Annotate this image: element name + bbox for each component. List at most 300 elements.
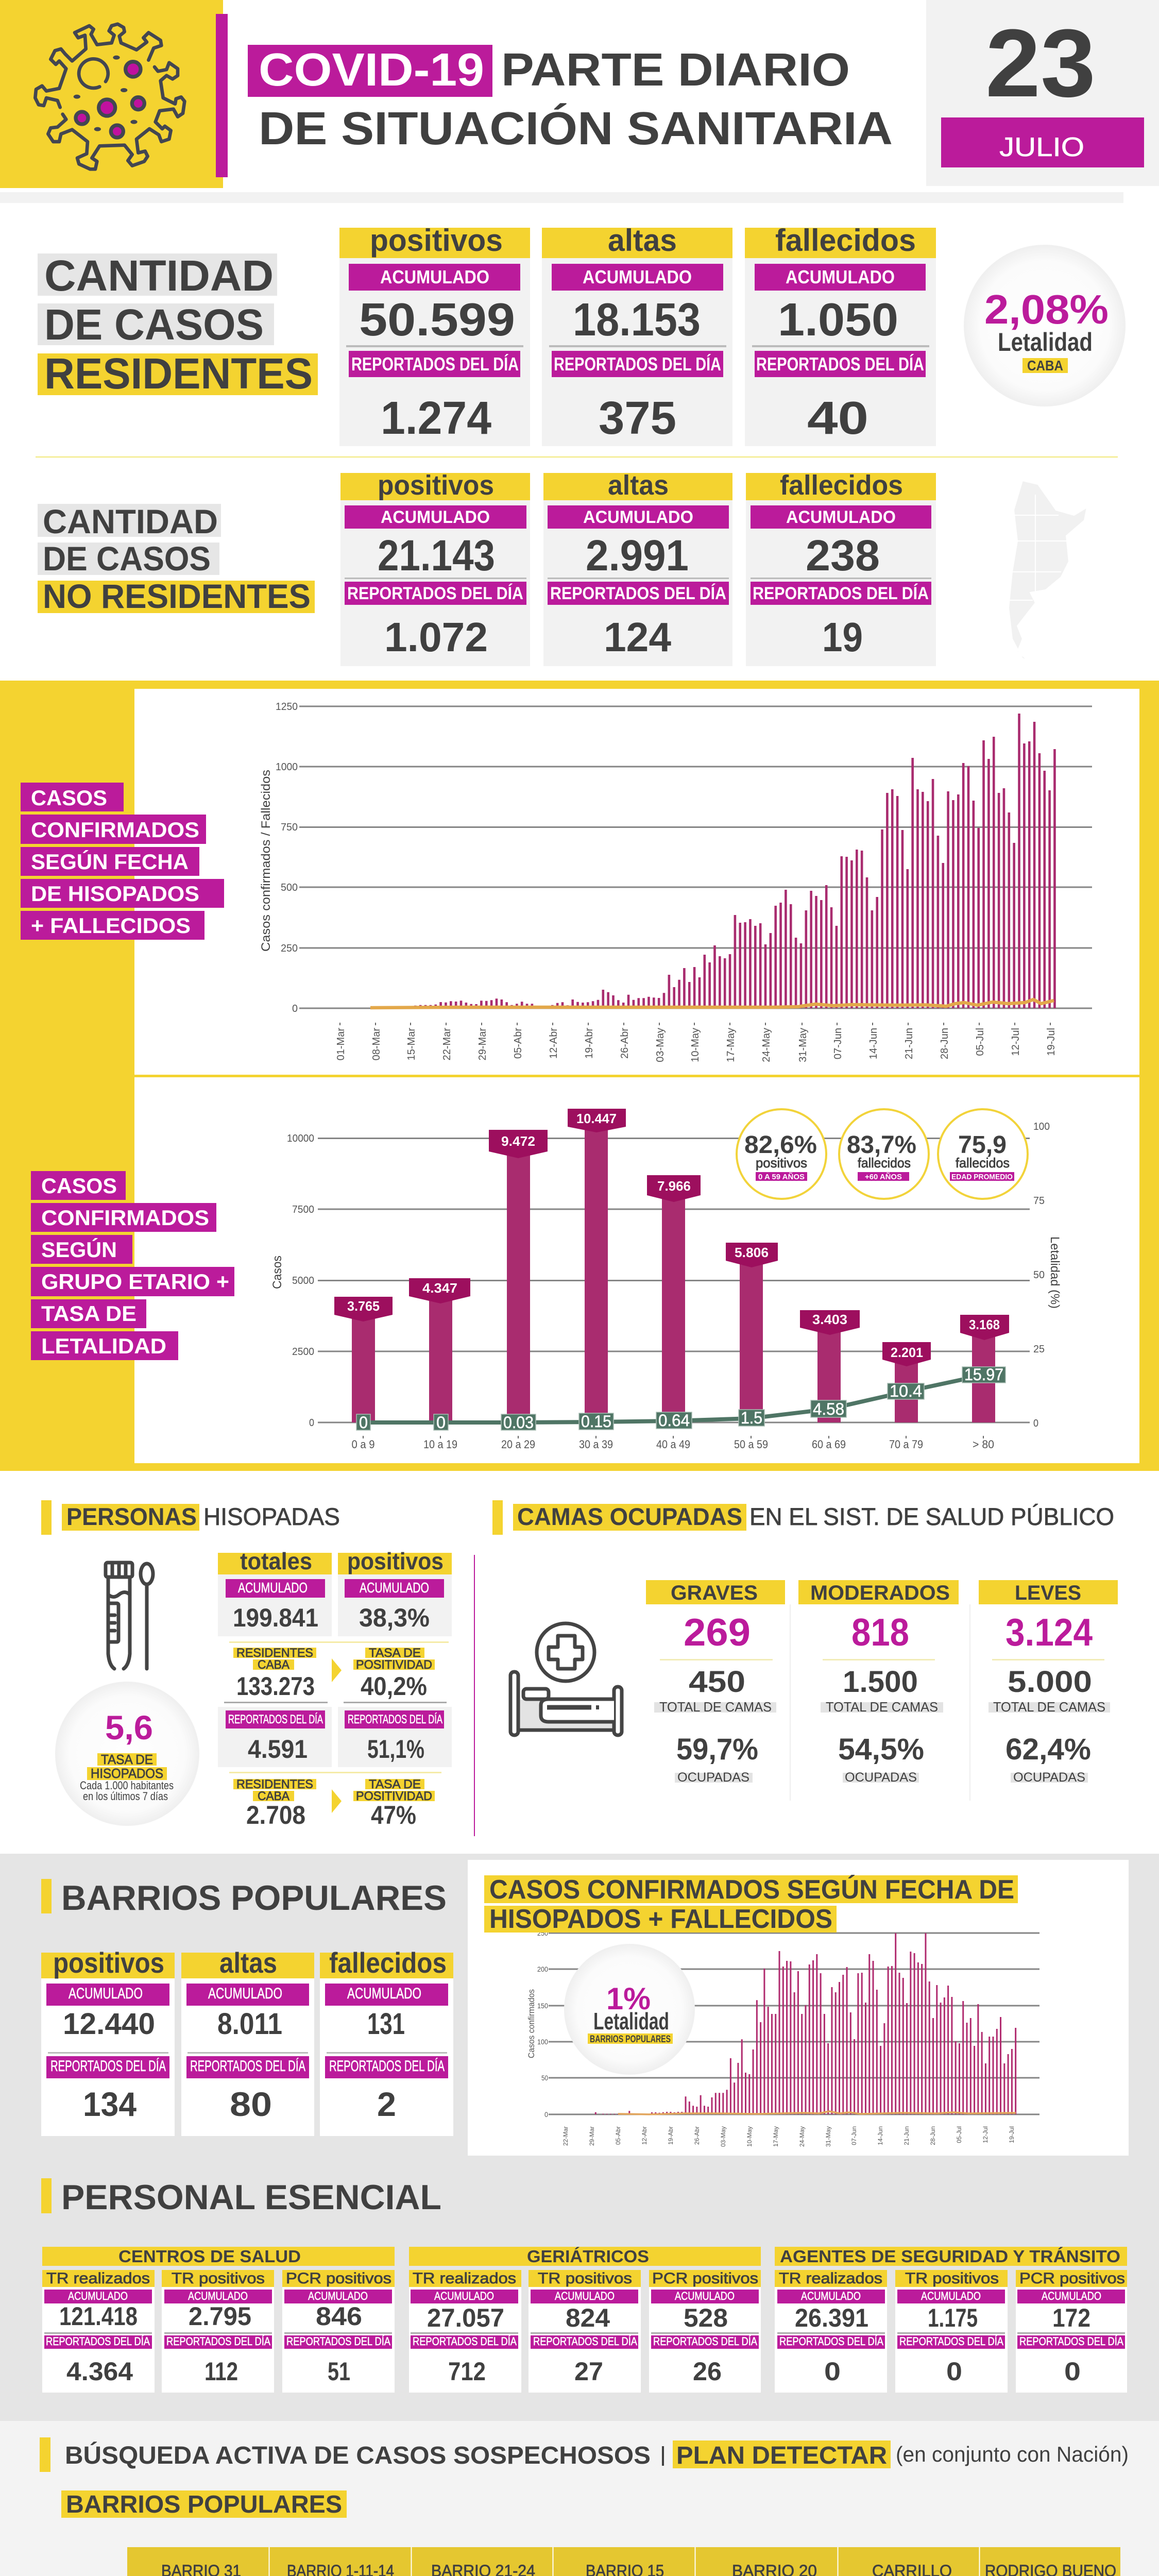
panel: leves: OCUPADAS — [1013, 1770, 1085, 1785]
bar chart: age groups: Casos — [270, 1256, 284, 1289]
column: PCR positivos: 172 — [1052, 2303, 1090, 2332]
section background: barrios populares and personal esencial — [0, 1854, 1159, 2421]
column: TR positivos: REPORTADOS DEL DÍA — [533, 2335, 637, 2348]
bar chart: daily cases: 1250 — [276, 701, 298, 713]
panel: barrios altas — [181, 1946, 314, 2136]
callout: letalidad CABA: CABA — [1027, 358, 1063, 374]
column: TR realizados: 4.364 — [66, 2357, 133, 2386]
column: PCR positivos: ACUMULADO — [675, 2290, 735, 2302]
callout: letalidad barrios: Letalidad — [593, 2008, 669, 2035]
panel: leves: TOTAL DE CAMAS — [993, 1699, 1105, 1715]
panel: geriatricos — [409, 2247, 761, 2393]
bar chart: age groups: 20 a 29 — [501, 1438, 535, 1451]
panel: totales acumulado — [218, 1548, 332, 1636]
panel: geriatricos: GERIÁTRICOS — [527, 2247, 649, 2266]
panel: totales acumulado: 199.841 — [233, 1603, 318, 1632]
heading: casos confirmados por fecha: SEGÚN FECHA — [31, 849, 189, 874]
callout: tasa de hisopados: TASA DE — [101, 1752, 153, 1767]
panel: residentes positivos: 1.274 — [381, 393, 491, 444]
bar chart: daily cases: 10-May — [690, 1028, 701, 1062]
bar chart: daily cases: 29-Mar — [477, 1028, 488, 1060]
panel: barrios positivos: 134 — [83, 2085, 137, 2123]
panel: residentes altas: altas — [608, 223, 677, 258]
column: TR positivos: ACUMULADO — [188, 2290, 248, 2302]
column: TR positivos: ACUMULADO — [921, 2290, 981, 2302]
bar chart: barrios daily cases: 07-Jun — [850, 2126, 858, 2145]
bar chart: daily cases: 24-May — [761, 1028, 772, 1062]
bar chart: age groups: 0 — [309, 1417, 314, 1429]
panel: leves: 5.000 — [1008, 1665, 1092, 1699]
panel: barrios altas: ACUMULADO — [208, 1985, 282, 2002]
heading: busqueda activa plan detectar — [40, 2437, 1129, 2472]
residentes CABA block 2: 47% — [371, 1801, 416, 1829]
column: PCR positivos: PCR positivos — [1019, 2270, 1125, 2287]
bar chart: age groups: 3.168 — [969, 1317, 1000, 1332]
bar chart: age groups: 2.201 — [891, 1345, 923, 1360]
bar chart: daily cases: 05-Jul — [975, 1028, 986, 1056]
column: TR realizados: 121.418 — [59, 2302, 138, 2331]
bar chart: age groups: 0 — [359, 1413, 368, 1432]
column: PCR positivos: ACUMULADO — [1042, 2290, 1101, 2302]
callout: tasa de hisopados: HISOPADOS — [91, 1766, 163, 1781]
panel: no residentes fallecidos: REPORTADOS DEL DÍA — [753, 584, 929, 603]
column: TR realizados: REPORTADOS DEL DÍA — [779, 2335, 883, 2348]
panel: leves: LEVES — [1015, 1582, 1081, 1604]
bar chart: barrios daily cases: 100 — [537, 2038, 548, 2046]
header magenta accent bar — [216, 14, 228, 177]
callout: 75,9 edad promedio: 75,9 — [958, 1131, 1007, 1159]
panel: positivos acumulado: positivos — [347, 1548, 444, 1574]
bar chart: barrios daily cases: 28-Jun — [929, 2126, 936, 2145]
callout: tasa de hisopados — [55, 1682, 199, 1826]
bar chart: daily cases: 03-May — [655, 1028, 666, 1062]
panel: no residentes fallecidos: 19 — [822, 614, 863, 660]
bar chart: daily cases: 12-Jul — [1010, 1028, 1021, 1056]
heading: busqueda activa plan detectar: BÚSQUEDA ACTIVA DE CASOS SOSPECHOSOS — [65, 2441, 651, 2469]
bar chart: age groups: 0 — [1033, 1418, 1038, 1429]
column: TR positivos: REPORTADOS DEL DÍA — [166, 2335, 270, 2348]
bar chart: barrios daily cases: 12-Jul — [982, 2126, 989, 2143]
callout: tasa de hisopados: 5,6 — [105, 1708, 153, 1747]
column: TR realizados: REPORTADOS DEL DÍA — [46, 2335, 150, 2348]
panel: agentes de seguridad y transito: AGENTES DE SEGURIDAD Y TRÁNSITO — [780, 2247, 1120, 2266]
heading: cantidad de casos no residentes: CANTIDAD — [43, 502, 218, 540]
panel: chart casos confirmados — [21, 689, 1139, 1075]
callout: letalidad barrios — [564, 1944, 695, 2075]
bar chart: age groups: 2500 — [292, 1346, 314, 1358]
panel: residentes altas: REPORTADOS DEL DÍA — [554, 353, 721, 375]
column: PCR positivos: 846 — [316, 2302, 362, 2331]
residentes CABA block 2 — [233, 1777, 435, 1829]
callout: 75,9 edad promedio — [938, 1109, 1028, 1199]
heading: busqueda activa plan detectar: (en conjunto con Nación) — [896, 2442, 1129, 2466]
bar chart: daily cases: 05-Abr — [513, 1028, 524, 1059]
heading: personas hisopadas: PERSONAS — [66, 1503, 197, 1530]
residentes CABA block 1: 133.273 — [236, 1672, 315, 1701]
residentes CABA block 2: 2.708 — [246, 1801, 305, 1829]
column: TR positivos: 27 — [574, 2357, 603, 2386]
callout: 83,7% fallecidos — [839, 1109, 929, 1199]
bar chart: daily cases: Casos confirmados / Fallecidos — [259, 770, 273, 952]
panel: residentes altas — [542, 223, 732, 446]
residentes CABA block 2: RESIDENTES — [236, 1777, 313, 1791]
bar chart: age groups: Letalidad (%) — [1048, 1236, 1062, 1309]
residentes CABA block 2: POSITIVIDAD — [356, 1789, 432, 1803]
panel: no residentes positivos: positivos — [378, 470, 494, 501]
heading: cantidad de casos no residentes: DE CASOS — [43, 539, 211, 578]
column: TR positivos: ACUMULADO — [555, 2290, 615, 2302]
panel: residentes altas: 18.153 — [573, 294, 701, 346]
panel: residentes fallecidos: ACUMULADO — [786, 266, 895, 287]
heading: casos por grupo etario: SEGÚN — [41, 1237, 117, 1262]
heading: casos confirmados barrios: HISOPADOS + FALLECIDOS — [489, 1904, 832, 1934]
panel: totales reportados del dia: REPORTADOS DEL DÍA — [228, 1713, 323, 1726]
panel: residentes fallecidos — [745, 223, 936, 446]
heading: casos confirmados por fecha: CASOS — [31, 786, 107, 810]
column: PCR positivos: 528 — [684, 2303, 728, 2332]
column: TR positivos: TR positivos — [538, 2270, 632, 2287]
bar chart: daily cases: 21-Jun — [904, 1028, 915, 1059]
panel: residentes altas: 375 — [599, 393, 676, 444]
panel: agentes de seguridad y transito — [775, 2247, 1127, 2393]
bar chart: age groups: 50 a 59 — [734, 1438, 768, 1451]
column: TR positivos: 2.795 — [189, 2302, 251, 2331]
table: barrios populares — [127, 2547, 1120, 2576]
bar chart: age groups: 0.64 — [658, 1411, 690, 1430]
callout: letalidad CABA: 2,08% — [984, 286, 1109, 332]
heading: casos por grupo etario: CONFIRMADOS — [41, 1206, 209, 1230]
column: TR positivos — [162, 2270, 274, 2393]
panel: residentes fallecidos: REPORTADOS DEL DÍA — [756, 353, 924, 375]
callout: tasa de hisopados: en los últimos 7 días — [83, 1790, 168, 1803]
bar chart: barrios daily cases: 19-Abr — [667, 2126, 674, 2145]
column: PCR positivos: 51 — [328, 2357, 350, 2386]
panel: residentes positivos: ACUMULADO — [380, 266, 489, 287]
callout: letalidad CABA: Letalidad — [998, 328, 1093, 357]
panel: barrios positivos: 12.440 — [63, 2007, 155, 2041]
panel: residentes positivos: REPORTADOS DEL DÍA — [351, 353, 519, 375]
bar chart: barrios daily cases — [526, 1929, 1039, 2147]
panel: leves: 62,4% — [1005, 1733, 1091, 1766]
bar chart: age groups: 7.966 — [657, 1178, 691, 1194]
panel: residentes positivos — [339, 223, 530, 446]
bar chart: daily cases: 28-Jun — [939, 1028, 950, 1059]
heading: cantidad de casos residentes: CANTIDAD — [44, 251, 274, 300]
heading: cantidad de casos no residentes: NO RESIDENTES — [43, 577, 311, 615]
panel: residentes altas: ACUMULADO — [583, 266, 692, 287]
callout: 75,9 edad promedio: EDAD PROMEDIO — [951, 1173, 1013, 1181]
panel: barrios chart — [468, 1860, 1129, 2156]
bar chart: barrios daily cases: 250 — [537, 1929, 548, 1937]
bar chart: barrios daily cases: 50 — [541, 2074, 548, 2082]
panel: graves: OCUPADAS — [677, 1770, 749, 1785]
panel: barrios fallecidos: REPORTADOS DEL DÍA — [329, 2058, 445, 2075]
date panel: 23 — [985, 9, 1096, 117]
column: PCR positivos — [1016, 2270, 1127, 2393]
column: PCR positivos: 0 — [1064, 2357, 1081, 2386]
panel: moderados — [798, 1580, 959, 1785]
bar chart: barrios daily cases: 05-Abr — [615, 2126, 622, 2145]
heading: casos confirmados barrios — [484, 1875, 1018, 1934]
bar chart: age groups: 70 a 79 — [889, 1438, 923, 1451]
panel: residentes positivos: positivos — [370, 223, 503, 258]
panel: barrios fallecidos — [320, 1946, 453, 2136]
heading: casos confirmados por fecha: DE HISOPADOS — [31, 882, 199, 906]
residentes CABA block 1 — [233, 1646, 435, 1701]
bar chart: age groups: 3.403 — [812, 1312, 847, 1327]
column: PCR positivos — [649, 2270, 761, 2393]
residentes CABA block 1: RESIDENTES — [236, 1646, 313, 1660]
icon: test tube and swab — [106, 1563, 153, 1669]
column: TR realizados — [42, 2270, 155, 2393]
column: PCR positivos: 26 — [693, 2357, 722, 2386]
bar chart: age groups: 30 a 39 — [579, 1438, 613, 1451]
bar chart: age groups: 3.765 — [347, 1298, 380, 1314]
bar chart: age groups: 0.03 — [503, 1413, 534, 1432]
panel: barrios fallecidos: ACUMULADO — [347, 1985, 421, 2002]
heading: personas hisopadas: HISOPADAS — [203, 1503, 340, 1530]
residentes CABA block 2: TASA DE — [369, 1777, 421, 1791]
bar chart: barrios daily cases: 29-Mar — [588, 2126, 595, 2146]
callout: 82,6% positivos: 82,6% — [744, 1131, 817, 1159]
bar chart: daily cases: 17-May — [725, 1028, 737, 1062]
bar chart: barrios daily cases: 12-Abr — [641, 2126, 648, 2145]
panel: barrios positivos — [41, 1946, 175, 2136]
callout: 83,7% fallecidos: +60 AÑOS — [865, 1172, 902, 1181]
bar chart: barrios daily cases: 0 — [544, 2110, 548, 2119]
title: COVID-19 — [259, 44, 484, 96]
bar chart: daily cases: 22-Mar — [441, 1028, 453, 1060]
column: TR realizados: ACUMULADO — [801, 2290, 861, 2302]
bar chart: barrios daily cases: 22-Mar — [562, 2126, 569, 2146]
bar chart: barrios daily cases: 05-Jul — [956, 2126, 963, 2143]
bar chart: age groups — [270, 1109, 1062, 1451]
title — [248, 44, 893, 155]
column: TR positivos — [895, 2270, 1008, 2393]
panel: positivos reportados del dia: 51,1% — [367, 1735, 424, 1764]
panel: graves: TOTAL DE CAMAS — [659, 1699, 772, 1715]
bar chart: age groups: > 80 — [973, 1438, 994, 1451]
panel: barrios positivos: REPORTADOS DEL DÍA — [50, 2058, 166, 2075]
bar chart: barrios daily cases: Casos confirmados — [526, 1989, 536, 2058]
header icon panel — [0, 0, 223, 188]
panel: graves: GRAVES — [671, 1582, 758, 1604]
date panel — [926, 0, 1159, 186]
bar chart: daily cases: 15-Mar — [406, 1028, 417, 1060]
heading: camas ocupadas — [492, 1500, 1114, 1535]
bar chart: age groups: 10000 — [287, 1133, 314, 1144]
panel: barrios altas: 8.011 — [217, 2007, 282, 2041]
heading: casos por grupo etario: GRUPO ETARIO + — [41, 1269, 229, 1294]
panel: no residentes fallecidos: ACUMULADO — [786, 507, 896, 527]
icon: map of Argentina — [1009, 481, 1087, 660]
panel: graves: 59,7% — [676, 1733, 758, 1766]
panel: residentes positivos: 50.599 — [359, 294, 515, 346]
heading: personal esencial: PERSONAL ESENCIAL — [61, 2178, 441, 2217]
bar chart: daily cases: 19-Jul — [1046, 1028, 1057, 1056]
panel: moderados: OCUPADAS — [845, 1770, 917, 1785]
panel: moderados: 1.500 — [843, 1665, 918, 1699]
residentes CABA block 1: CABA — [258, 1658, 289, 1672]
title: PARTE DIARIO — [501, 44, 850, 96]
column: TR realizados — [775, 2270, 887, 2393]
bar chart: age groups: 9.472 — [501, 1133, 535, 1149]
section background: busqueda activa — [0, 2421, 1159, 2576]
bar chart: barrios daily cases: 10-May — [746, 2126, 753, 2147]
column: PCR positivos: PCR positivos — [286, 2270, 391, 2287]
column: TR positivos: 824 — [566, 2303, 610, 2332]
column: TR realizados: ACUMULADO — [68, 2290, 128, 2302]
column: TR positivos: REPORTADOS DEL DÍA — [899, 2335, 1003, 2348]
bar chart: age groups: 4.58 — [813, 1400, 844, 1418]
bar chart: age groups: 5000 — [292, 1275, 314, 1286]
panel: no residentes fallecidos: 238 — [806, 531, 880, 580]
heading: casos por grupo etario — [31, 1171, 234, 1360]
panel: no residentes altas: altas — [608, 470, 669, 501]
panel: no residentes fallecidos: fallecidos — [780, 470, 903, 501]
bar chart: age groups: 40 a 49 — [656, 1438, 690, 1451]
bar chart: age groups: 10.4 — [890, 1382, 922, 1400]
heading: camas ocupadas: EN EL SIST. DE SALUD PÚBLICO — [749, 1503, 1114, 1530]
bar chart: age groups: 0.15 — [581, 1412, 611, 1431]
bar chart: barrios daily cases: 31-May — [825, 2126, 832, 2147]
panel: no residentes positivos: 1.072 — [384, 614, 488, 660]
bar chart: daily cases: 08-Mar — [371, 1028, 382, 1060]
icon: hospital bed — [510, 1623, 622, 1735]
panel: barrios altas: 80 — [230, 2085, 272, 2123]
panel: residentes fallecidos: fallecidos — [775, 223, 916, 258]
panel: no residentes altas — [543, 470, 732, 666]
bar chart: daily cases: 500 — [281, 882, 298, 893]
panel: graves — [646, 1580, 785, 1785]
panel: no residentes altas: 124 — [604, 614, 671, 660]
residentes CABA block 2: CABA — [258, 1789, 289, 1803]
bar chart: daily cases: 750 — [281, 822, 298, 833]
column: TR positivos: TR positivos — [172, 2270, 265, 2287]
bar chart: barrios daily cases: 19-Jul — [1008, 2126, 1015, 2143]
column: PCR positivos: ACUMULADO — [308, 2290, 368, 2302]
bar chart: daily cases: 14-Jun — [868, 1028, 879, 1059]
panel: no residentes positivos: ACUMULADO — [381, 507, 490, 527]
heading: casos confirmados barrios: CASOS CONFIRMADOS SEGÚN FECHA DE — [489, 1875, 1014, 1905]
column: TR positivos — [529, 2270, 641, 2393]
bar chart: age groups: 75 — [1033, 1195, 1045, 1207]
bar chart: daily cases: 01-Mar — [335, 1028, 347, 1060]
column: TR positivos: 112 — [204, 2357, 238, 2386]
heading: cantidad de casos no residentes — [38, 502, 315, 615]
bar chart: age groups: 7500 — [292, 1204, 314, 1215]
heading: busqueda activa plan detectar: PLAN DETECTAR — [676, 2442, 887, 2469]
bar chart: daily cases: 0 — [292, 1003, 298, 1014]
panel: centros de salud — [42, 2247, 395, 2393]
column: TR positivos: TR positivos — [905, 2270, 999, 2287]
column: TR realizados — [409, 2270, 521, 2393]
panel: positivos acumulado: ACUMULADO — [360, 1580, 429, 1596]
heading: barrios populares: BARRIOS POPULARES — [61, 1878, 447, 1918]
panel: moderados: TOTAL DE CAMAS — [826, 1699, 938, 1715]
panel: no residentes altas: ACUMULADO — [583, 507, 693, 527]
panel: positivos acumulado — [338, 1548, 452, 1636]
heading: cantidad de casos residentes — [38, 251, 318, 398]
heading: personas hisopadas — [41, 1500, 340, 1535]
icon: coronavirus — [35, 24, 184, 169]
column: TR realizados: TR realizados — [46, 2270, 150, 2287]
panel: barrios fallecidos: 131 — [367, 2007, 405, 2041]
bar chart: daily cases — [259, 701, 1092, 1062]
panel: no residentes positivos — [340, 470, 530, 666]
heading: casos por grupo etario: LETALIDAD — [41, 1334, 166, 1358]
heading: casos por grupo etario: CASOS — [41, 1174, 117, 1198]
heading: casos confirmados por fecha: CONFIRMADOS — [31, 818, 199, 842]
bar chart: daily cases: 19-Abr — [584, 1028, 595, 1059]
callout: letalidad barrios: 1% — [606, 1981, 651, 2016]
bar chart: barrios daily cases: 21-Jun — [903, 2126, 910, 2145]
callout: 82,6% positivos — [737, 1109, 826, 1199]
bar chart: barrios daily cases: 26-Abr — [693, 2126, 701, 2145]
column: TR positivos: 1.175 — [928, 2303, 978, 2332]
heading: casos confirmados por fecha: + FALLECIDOS — [31, 913, 191, 938]
panel: leves: 3.124 — [1005, 1611, 1093, 1654]
bar chart: barrios daily cases: 200 — [537, 1965, 548, 1973]
panel: no residentes positivos: REPORTADOS DEL DÍA — [347, 584, 523, 603]
column: TR realizados: TR realizados — [413, 2270, 516, 2287]
callout: 82,6% positivos: 0 A 59 AÑOS — [758, 1172, 805, 1181]
callout: letalidad barrios: BARRIOS POPULARES — [590, 2034, 671, 2045]
panel: totales acumulado: ACUMULADO — [238, 1580, 308, 1596]
panel: totales reportados del dia: 4.591 — [248, 1735, 308, 1764]
column: TR realizados: 712 — [448, 2357, 486, 2386]
bar chart: age groups: 60 a 69 — [812, 1438, 846, 1451]
bar chart: daily cases: 07-Jun — [832, 1028, 844, 1059]
column: TR realizados: 27.057 — [427, 2303, 504, 2332]
heading: cantidad de casos residentes: DE CASOS — [44, 300, 264, 349]
callout: letalidad CABA — [964, 245, 1126, 406]
bar chart: barrios daily cases: 150 — [537, 2002, 548, 2010]
heading: cantidad de casos residentes: RESIDENTES — [44, 349, 313, 398]
callout: 82,6% positivos: positivos — [756, 1155, 807, 1171]
bar chart: age groups: 0 — [436, 1413, 446, 1432]
panel: totales acumulado: totales — [240, 1548, 312, 1574]
panel: moderados: MODERADOS — [810, 1582, 950, 1604]
column: PCR positivos — [282, 2270, 395, 2393]
yellow band: charts — [0, 681, 1159, 1471]
column: PCR positivos: REPORTADOS DEL DÍA — [286, 2335, 390, 2348]
column: TR realizados: REPORTADOS DEL DÍA — [413, 2335, 517, 2348]
date panel: JULIO — [999, 132, 1084, 162]
bar chart: age groups: 4.347 — [422, 1280, 457, 1296]
callout: 83,7% fallecidos: fallecidos — [858, 1155, 911, 1171]
heading: camas ocupadas: CAMAS OCUPADAS — [517, 1503, 742, 1530]
panel: totales reportados del dia — [218, 1707, 332, 1767]
column: TR positivos: 0 — [946, 2357, 962, 2386]
callout: 75,9 edad promedio: fallecidos — [956, 1155, 1010, 1171]
residentes CABA block 1: POSITIVIDAD — [356, 1658, 432, 1672]
column: PCR positivos: PCR positivos — [652, 2270, 758, 2287]
panel: no residentes positivos: 21.143 — [378, 531, 495, 580]
bar chart: age groups: 25 — [1033, 1344, 1045, 1355]
panel: no residentes altas: REPORTADOS DEL DÍA — [550, 584, 726, 603]
panel: barrios altas: REPORTADOS DEL DÍA — [190, 2058, 305, 2075]
panel: barrios fallecidos: 2 — [377, 2085, 396, 2123]
bar chart: age groups: 10.447 — [576, 1111, 617, 1126]
panel: moderados: 818 — [851, 1611, 909, 1654]
bar chart: daily cases: 12-Abr — [548, 1028, 559, 1059]
panel: residentes fallecidos: 40 — [807, 393, 868, 444]
bar chart: age groups: 50 — [1033, 1269, 1045, 1281]
column: TR realizados: TR realizados — [779, 2270, 882, 2287]
panel: barrios positivos: positivos — [53, 1946, 164, 1979]
panel: leves — [979, 1580, 1118, 1785]
